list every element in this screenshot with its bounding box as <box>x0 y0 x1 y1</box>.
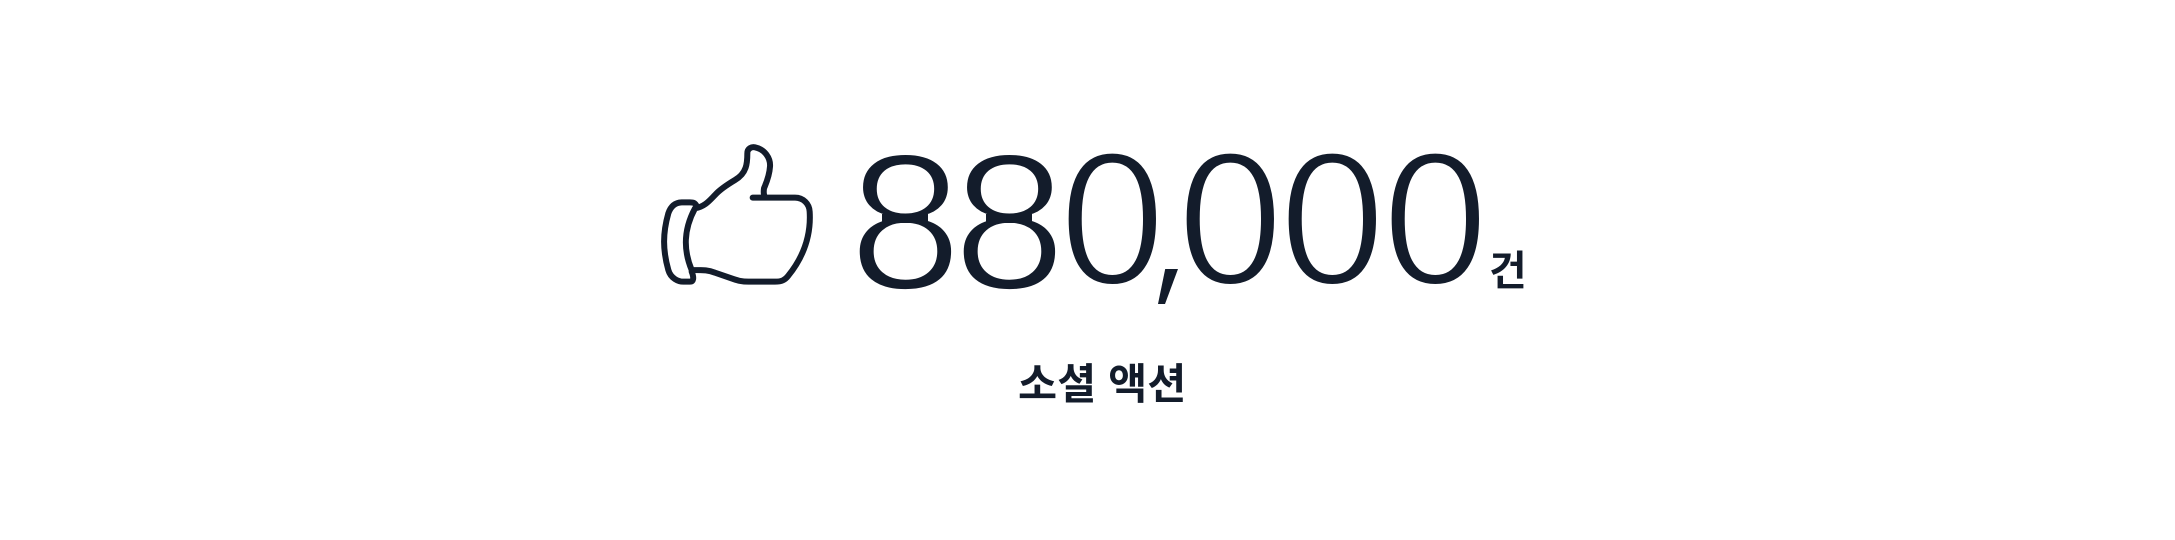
big number: 8 <box>948 119 1071 333</box>
unit: 건 <box>1489 237 1527 297</box>
comma <box>1158 269 1178 304</box>
big number: 0 <box>1054 119 1171 327</box>
big number: 8 <box>844 119 967 333</box>
label: 소셜 액션 <box>1018 351 1186 412</box>
icon: thumbs up <box>661 144 813 285</box>
big number <box>844 119 1494 333</box>
big number: 0 <box>1172 119 1289 327</box>
big number: 0 <box>1274 119 1391 327</box>
big number: 0 <box>1377 119 1494 327</box>
